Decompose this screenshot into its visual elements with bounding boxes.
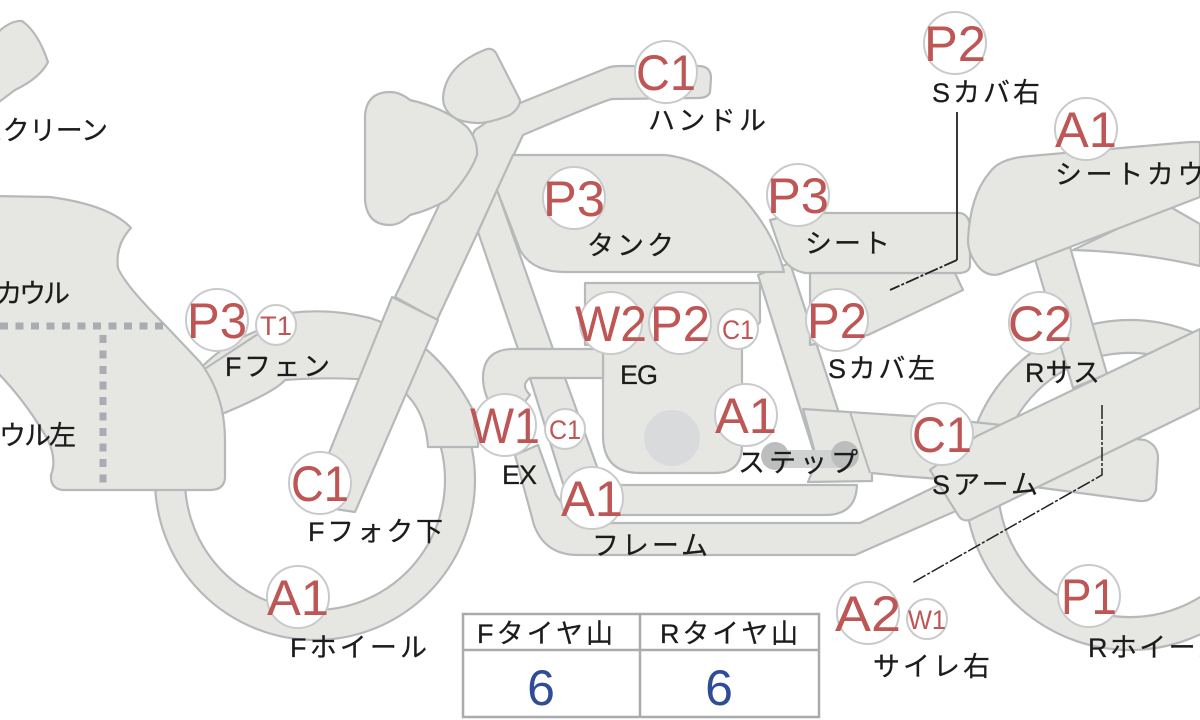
part: rear wheel bbox=[965, 320, 1200, 650]
part: seat bbox=[770, 213, 970, 273]
marker A1 frame: A1 bbox=[561, 471, 623, 527]
part: seat cowl bbox=[968, 142, 1200, 275]
part: engine bbox=[585, 283, 760, 473]
label: tank: タンク bbox=[587, 231, 674, 261]
part: meter bbox=[443, 49, 520, 123]
part: tank bbox=[497, 155, 784, 272]
part: screen bbox=[0, 21, 48, 105]
part: exhaust pipe bbox=[483, 349, 603, 428]
tire tread table bbox=[463, 614, 819, 717]
label: front fender: Fフェン bbox=[225, 352, 330, 382]
label: exhaust: EX bbox=[502, 460, 537, 490]
marker P3 tank: P3 bbox=[543, 171, 605, 227]
marker P1 rear wheel: P1 bbox=[1061, 569, 1117, 625]
label: handle: ハンドル bbox=[648, 106, 766, 136]
marker W1 silencer: W1 bbox=[908, 605, 946, 635]
marker A1 seat cowl: A1 bbox=[1055, 102, 1117, 158]
marker C1 swing arm: C1 bbox=[912, 407, 972, 463]
part: cowl bbox=[0, 196, 225, 490]
label: side cover left: Sカバ左 bbox=[828, 354, 935, 384]
part: engine cover circle bbox=[644, 410, 700, 466]
icon: left step bbox=[761, 442, 789, 470]
marker C2 rear suspension: C2 bbox=[1008, 296, 1072, 352]
label: frame: フレーム bbox=[592, 531, 708, 561]
part: side cover bbox=[810, 273, 963, 345]
table frame bbox=[463, 614, 819, 717]
cowl horizontal dotted boundary bbox=[0, 322, 165, 330]
marker A1 front wheel: A1 bbox=[267, 570, 329, 626]
marker C1 front fork: C1 bbox=[291, 456, 349, 512]
marker C1 engine bbox=[718, 309, 758, 349]
table header divider bbox=[463, 614, 819, 717]
marker T1 front fender bbox=[256, 305, 296, 345]
part: lower fork bbox=[308, 297, 438, 512]
part: front wheel bbox=[155, 320, 475, 640]
labels and damage codes bbox=[186, 12, 1120, 644]
marker P3 front fender: P3 bbox=[187, 293, 247, 349]
marker W1 exhaust: W1 bbox=[470, 398, 540, 454]
marker P2 side cover left: P2 bbox=[807, 293, 867, 349]
label: front fork lower: Fフォク下 bbox=[308, 517, 443, 547]
part: upper down tube bbox=[478, 190, 553, 349]
marker A1 engine lower: A1 bbox=[715, 388, 777, 444]
marker A2 silencer: A2 bbox=[835, 586, 901, 642]
part: headlight bbox=[365, 92, 477, 225]
marker P3 seat: P3 bbox=[767, 168, 829, 224]
part: muffler bbox=[930, 329, 1200, 520]
marker C1 exhaust bbox=[545, 409, 585, 449]
label: rear suspension: Rサス bbox=[1025, 358, 1100, 388]
label: side cover right: Sカバ右 bbox=[932, 78, 1040, 108]
value: front tire tread: 6 bbox=[527, 660, 555, 716]
leader: silencer right bbox=[912, 405, 1102, 583]
header: front tire tread: Fタイヤ山 bbox=[477, 619, 613, 649]
header: rear tire tread: Rタイヤ山 bbox=[660, 619, 798, 649]
part: lower frame bbox=[515, 445, 965, 555]
part: swing arm tube edge bbox=[850, 412, 870, 473]
part: lower pipe bbox=[600, 485, 857, 515]
leader: side cover right vertical bbox=[956, 112, 958, 260]
icon: right step bbox=[831, 441, 859, 469]
marker P2 side cover right: P2 bbox=[924, 16, 986, 72]
part: swing arm bbox=[803, 409, 1158, 501]
marker W2 engine: W2 bbox=[575, 296, 647, 352]
part: inner frame tube bbox=[530, 378, 600, 505]
label: silencer right: サイレ右 bbox=[873, 652, 990, 682]
part: rear frame tube bbox=[758, 263, 838, 462]
part: upper fork and handlebar bbox=[395, 66, 711, 320]
value: rear tire tread: 6 bbox=[705, 660, 733, 716]
label: engine: EG bbox=[620, 360, 658, 390]
label: swing arm: Sアーム bbox=[932, 470, 1038, 500]
label: seat: シート bbox=[805, 229, 890, 259]
marker T1 front fender: T1 bbox=[260, 311, 292, 341]
marker P2 engine: P2 bbox=[650, 296, 710, 352]
marker C1 engine: C1 bbox=[722, 315, 754, 345]
leader: side cover right diagonal bbox=[890, 260, 957, 290]
part: rear strut bbox=[1073, 205, 1200, 266]
label: front wheel: Fホイール bbox=[290, 633, 427, 663]
part: rear shock bbox=[1035, 247, 1107, 388]
marker C1 handle: C1 bbox=[636, 45, 696, 101]
cowl vertical dotted boundary bbox=[100, 335, 106, 485]
label: step: ステップ bbox=[738, 448, 858, 478]
marker C1 exhaust: C1 bbox=[549, 415, 581, 445]
part: front fender bbox=[200, 311, 478, 447]
step guard bar bbox=[772, 450, 847, 468]
